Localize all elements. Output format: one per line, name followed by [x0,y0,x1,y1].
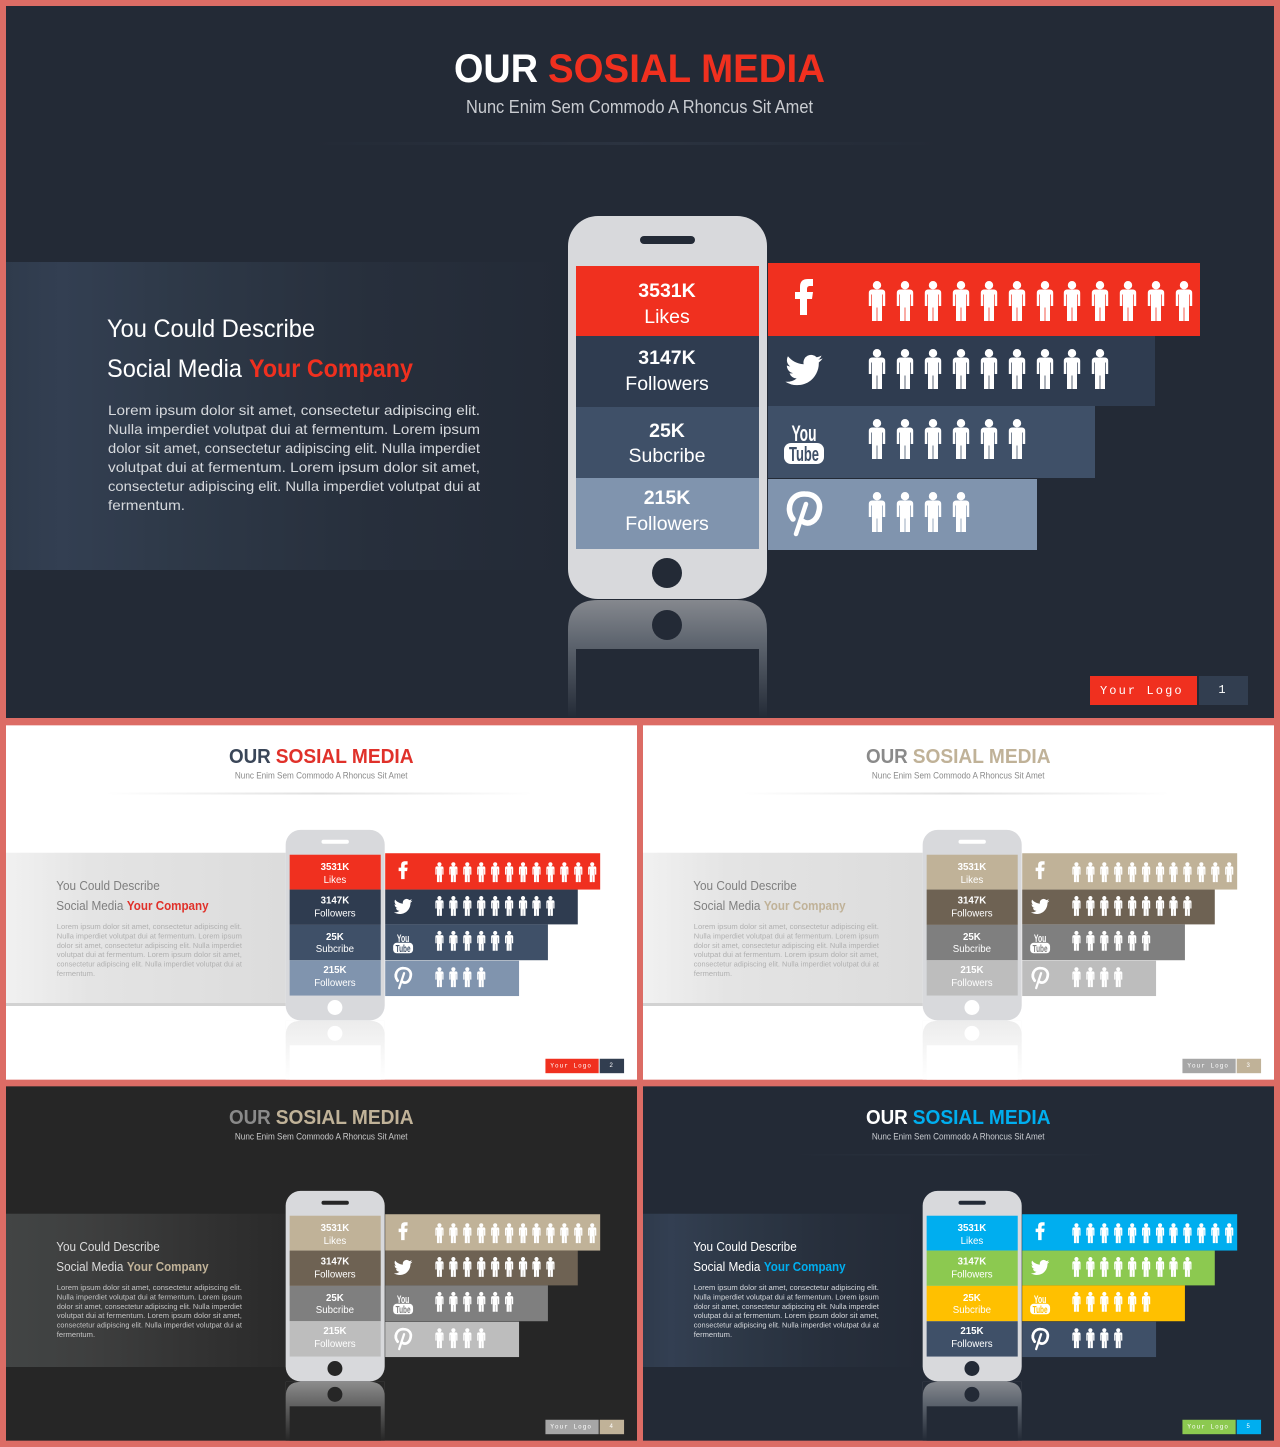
row: youtube: Tube [396,1305,411,1316]
title: SOSIAL MEDIA [913,1107,1051,1129]
footer logo: Your Logo [550,1063,592,1070]
footer logo [1182,1059,1261,1073]
row: facebook [927,1214,1237,1251]
body text: fermentum. [694,1332,732,1339]
body text: Lorem ipsum dolor sit amet, consectetur adipiscing elit. [108,402,480,418]
phone [923,1191,1022,1381]
row: youtube: 25K [963,932,981,943]
heading: You Could Describe [107,315,315,343]
body text [57,1285,242,1339]
phone reflection [923,1382,1022,1441]
row: twitter [290,890,578,925]
row: youtube: Subcribe [316,944,354,955]
body text: volutpat dui at fermentum. Lorem ipsum dolor sit amet, [694,1313,879,1320]
row: youtube: Subcribe [316,1305,354,1316]
title: OUR [866,746,908,768]
body text: fermentum. [694,971,732,978]
row: twitter [927,890,1215,925]
row: facebook: 3531K [321,862,349,873]
background band [643,853,923,1006]
footer logo: 3 [1246,1062,1250,1069]
row: twitter: Followers [951,1269,993,1280]
row: pinterest: 215K [323,1326,347,1337]
heading [56,1240,209,1274]
row: pinterest: Followers [314,1339,356,1350]
row: youtube: Tube [1033,1305,1048,1316]
subtitle: Nunc Enim Sem Commodo A Rhoncus Sit Amet [872,771,1045,781]
row: youtube [576,406,1095,478]
row: youtube: Tube [1033,944,1048,955]
body text: consectetur adipiscing elit. Nulla imperdiet volutpat dui at [108,478,480,494]
row: pinterest: 215K [323,965,347,976]
row: pinterest: Followers [625,513,709,535]
body text: Lorem ipsum dolor sit amet, consectetur adipiscing elit. [694,924,879,931]
body text: Nulla imperdiet volutpat dui at fermentum. Lorem ipsum [57,933,242,940]
row: twitter [576,336,1155,407]
body text: Nulla imperdiet volutpat dui at fermentum. Lorem ipsum [694,933,879,940]
heading: You Could Describe [693,879,797,893]
body text: dolor sit amet, consectetur adipiscing elit. Nulla imperdiet [694,943,879,950]
row: twitter: Followers [951,908,993,919]
phone [286,1191,385,1381]
subtitle: Nunc Enim Sem Commodo A Rhoncus Sit Amet [466,97,813,117]
phone [286,830,385,1020]
row: youtube: You [792,421,816,446]
row: pinterest: 215K [960,1326,984,1337]
row: pinterest [576,478,1037,550]
row: youtube: Tube [396,944,411,955]
phone reflection [286,1382,385,1441]
body text: consectetur adipiscing elit. Nulla imperdiet volutpat dui at [57,1323,242,1330]
heading: Social Media [56,899,124,913]
row: pinterest [927,1321,1156,1357]
footer logo [545,1059,624,1073]
heading: Social Media [107,355,242,383]
body text: consectetur adipiscing elit. Nulla imperdiet volutpat dui at [57,962,242,969]
row: pinterest [927,960,1156,996]
footer logo [1090,676,1248,705]
row: twitter [927,1251,1215,1286]
phone reflection [286,1021,385,1080]
row: twitter: 3147K [638,347,696,369]
background band [6,1214,286,1367]
row: youtube: You [1034,933,1046,945]
body text: volutpat dui at fermentum. Lorem ipsum dolor sit amet, [57,1313,242,1320]
panel: charcoal tan slide [6,1086,637,1441]
heading: You Could Describe [56,879,160,893]
row: youtube: Tube [789,444,819,466]
row: youtube: 25K [963,1293,981,1304]
row: facebook [927,853,1237,890]
heading: Social Media [693,899,761,913]
row: facebook [290,853,600,890]
row: twitter: Followers [314,908,356,919]
row: youtube [290,924,548,960]
heading: Your Company [764,899,846,913]
body text: Lorem ipsum dolor sit amet, consectetur adipiscing elit. [694,1285,879,1292]
body text: fermentum. [108,497,185,513]
body text: dolor sit amet, consectetur adipiscing elit. Nulla imperdiet [694,1304,879,1311]
row: pinterest [290,960,519,996]
body text: Lorem ipsum dolor sit amet, consectetur adipiscing elit. [57,924,242,931]
row: youtube: You [397,933,409,945]
heading: You Could Describe [693,1240,797,1254]
footer logo: 2 [609,1062,613,1069]
subtitle: Nunc Enim Sem Commodo A Rhoncus Sit Amet [872,1132,1045,1142]
heading [693,879,846,913]
row: pinterest: 215K [960,965,984,976]
row: facebook [576,263,1200,336]
row: twitter [290,1251,578,1286]
body text: volutpat dui at fermentum. Lorem ipsum dolor sit amet, [108,459,480,475]
row: twitter: Followers [314,1269,356,1280]
body text: consectetur adipiscing elit. Nulla imperdiet volutpat dui at [694,1323,879,1330]
row: youtube: 25K [326,1293,344,1304]
footer logo [545,1420,624,1434]
phone [568,216,767,599]
body text: dolor sit amet, consectetur adipiscing elit. Nulla imperdiet [108,440,480,456]
row: twitter: 3147K [321,1256,349,1267]
row: twitter: 3147K [958,1256,986,1267]
title: SOSIAL MEDIA [276,746,414,768]
body text: volutpat dui at fermentum. Lorem ipsum dolor sit amet, [57,952,242,959]
title: SOSIAL MEDIA [276,1107,414,1129]
footer logo: 1 [1218,683,1226,697]
row: facebook: Likes [324,1236,346,1247]
panel: white tan slide [643,725,1274,1080]
body text [694,924,879,978]
row: youtube: You [397,1294,409,1306]
row: youtube: Subcribe [629,445,705,467]
row: facebook: Likes [961,875,983,886]
row: youtube [290,1285,548,1321]
footer logo: 4 [609,1423,613,1430]
row: facebook [290,1214,600,1251]
body text: fermentum. [57,971,95,978]
title: OUR [229,1107,271,1129]
row: facebook: 3531K [958,862,986,873]
footer logo: Your Logo [1100,684,1184,698]
row: youtube: 25K [326,932,344,943]
panel: navy blue slide [643,1086,1274,1441]
body text: dolor sit amet, consectetur adipiscing elit. Nulla imperdiet [57,943,242,950]
heading: Your Company [127,899,209,913]
heading: Social Media [56,1260,124,1274]
heading [107,315,413,383]
panel: main dark slide [6,6,1274,718]
row: pinterest: Followers [951,1339,993,1350]
title: OUR [454,47,538,91]
row: facebook: 3531K [638,280,696,302]
row: youtube: Subcribe [953,944,991,955]
row: facebook: 3531K [321,1223,349,1234]
body text [108,402,480,513]
heading: Your Company [127,1260,209,1274]
heading: Social Media [693,1260,761,1274]
body text [694,1285,879,1339]
row: youtube: Subcribe [953,1305,991,1316]
heading [56,879,209,913]
title: SOSIAL MEDIA [913,746,1051,768]
background band [6,853,286,1006]
footer logo [1182,1420,1261,1434]
body text [57,924,242,978]
row: youtube [927,924,1185,960]
body text: fermentum. [57,1332,95,1339]
row: pinterest: Followers [314,978,356,989]
footer logo: Your Logo [550,1424,592,1431]
row: pinterest: Followers [951,978,993,989]
panel: white red slide [6,725,637,1080]
subtitle: Nunc Enim Sem Commodo A Rhoncus Sit Amet [235,1132,408,1142]
row: pinterest [290,1321,519,1357]
footer logo: Your Logo [1187,1063,1229,1070]
row: facebook: Likes [324,875,346,886]
row: facebook: 3531K [958,1223,986,1234]
title: OUR [229,746,271,768]
title: OUR [866,1107,908,1129]
body text: consectetur adipiscing elit. Nulla imperdiet volutpat dui at [694,962,879,969]
body text: Lorem ipsum dolor sit amet, consectetur adipiscing elit. [57,1285,242,1292]
phone [923,830,1022,1020]
row: youtube: You [1034,1294,1046,1306]
row: facebook: Likes [644,306,690,328]
row: facebook: Likes [961,1236,983,1247]
row: youtube [927,1285,1185,1321]
phone reflection [568,600,767,718]
body text: Nulla imperdiet volutpat dui at fermentum. Lorem ipsum [57,1294,242,1301]
heading: Your Company [764,1260,846,1274]
row: youtube: 25K [649,420,685,442]
heading: You Could Describe [56,1240,160,1254]
row: twitter: 3147K [321,895,349,906]
body text: Nulla imperdiet volutpat dui at fermentum. Lorem ipsum [108,421,480,437]
heading [693,1240,846,1274]
background band [643,1214,923,1367]
body text: Nulla imperdiet volutpat dui at fermentum. Lorem ipsum [694,1294,879,1301]
footer logo: Your Logo [1187,1424,1229,1431]
body text: volutpat dui at fermentum. Lorem ipsum dolor sit amet, [694,952,879,959]
body text: dolor sit amet, consectetur adipiscing elit. Nulla imperdiet [57,1304,242,1311]
title: SOSIAL MEDIA [548,47,825,91]
row: twitter: 3147K [958,895,986,906]
row: pinterest: 215K [644,487,690,509]
background band [6,262,568,570]
row: twitter: Followers [625,373,709,395]
footer logo: 5 [1246,1423,1250,1430]
phone reflection [923,1021,1022,1080]
heading: Your Company [249,355,413,383]
subtitle: Nunc Enim Sem Commodo A Rhoncus Sit Amet [235,771,408,781]
